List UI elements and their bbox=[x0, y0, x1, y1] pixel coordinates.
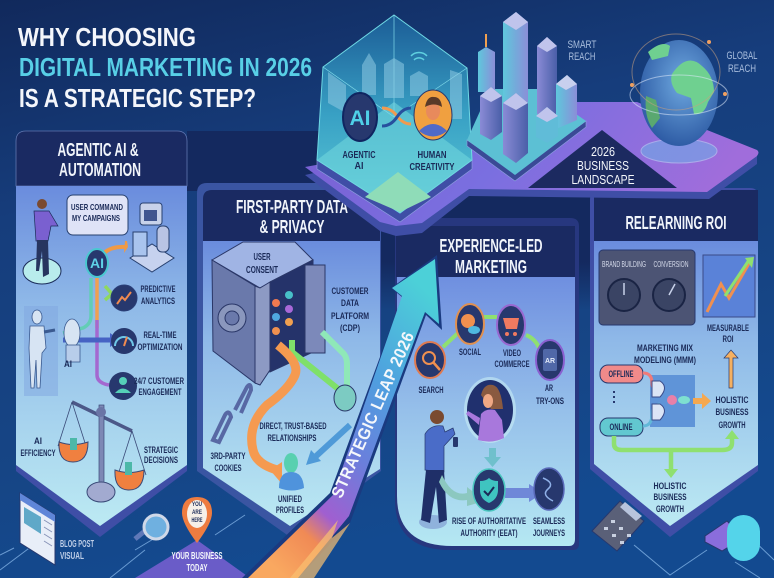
label: holistic growth bottom bbox=[654, 481, 687, 515]
channel labels: VIDEO bbox=[503, 348, 521, 359]
labels: agentic AI and human creativity: HUMAN bbox=[418, 149, 446, 161]
label: smart reach: SMART bbox=[568, 39, 597, 51]
label: global reach: REACH bbox=[728, 63, 756, 75]
arrow: strategic leap: STRATEGIC LEAP 2026 bbox=[328, 329, 418, 501]
top platform: 2026 business landscape bbox=[305, 12, 758, 236]
channel labels: COMMERCE bbox=[494, 359, 530, 370]
icon: you are here pin: ARE bbox=[192, 509, 202, 516]
icon: search bbox=[415, 342, 445, 378]
label: blog post visual: BLOG POST bbox=[60, 539, 94, 550]
icon: robot at console bbox=[130, 203, 174, 272]
speech bubble: MY CAMPAIGNS bbox=[72, 213, 120, 223]
icon: real-time optimization bbox=[111, 328, 183, 354]
icon: predictive analytics bbox=[111, 284, 176, 311]
glass slab: AI and creativity bbox=[317, 15, 472, 222]
diagram: MMM logic flow: OFFLINE bbox=[608, 369, 634, 380]
label: blog post visual: VISUAL bbox=[60, 551, 84, 562]
heading: experience-led: EXPERIENCE-LED bbox=[440, 236, 542, 256]
icon: AI badge bbox=[343, 93, 377, 141]
label: measurable ROI: MEASURABLE bbox=[707, 323, 749, 334]
icon: customer engagement: 24/7 CUSTOMER bbox=[134, 376, 184, 387]
labels: authority and journeys: JOURNEYS bbox=[533, 528, 565, 539]
icon: calculator bbox=[592, 501, 644, 551]
icon: balance scale bbox=[58, 402, 146, 502]
label: blog post visual bbox=[60, 539, 94, 562]
heading: agentic AI: AUTOMATION bbox=[59, 160, 141, 180]
heading: first-party data bbox=[236, 197, 348, 237]
label: AI: AI bbox=[64, 359, 72, 370]
arrow: green growth path bbox=[614, 430, 739, 478]
label: smart reach: REACH bbox=[568, 51, 596, 63]
control panel: brand building and conversion: CONVERSION bbox=[654, 260, 689, 269]
channel labels: AR bbox=[545, 383, 553, 394]
label: AI efficiency: AI bbox=[34, 436, 42, 447]
label: strategic decisions bbox=[144, 445, 178, 466]
label: marketing mix modeling: MARKETING MIX bbox=[637, 343, 693, 354]
label: 3rd-party cookies: COOKIES bbox=[214, 463, 242, 474]
icon: blog post visual bbox=[20, 493, 55, 565]
figure: woman in circle bbox=[464, 377, 516, 443]
city skyline bbox=[467, 12, 586, 181]
label: strategic decisions: STRATEGIC bbox=[144, 445, 178, 456]
label: 3rd-party cookies bbox=[210, 451, 246, 474]
label: measurable ROI: ROI bbox=[722, 334, 734, 345]
icon: cyan capsule bbox=[727, 515, 760, 561]
icon: globe bbox=[630, 34, 728, 163]
label: holistic growth bottom: HOLISTIC bbox=[654, 481, 687, 492]
figure: humanoid robot bbox=[24, 306, 80, 396]
icon: real-time optimization: OPTIMIZATION bbox=[138, 342, 183, 353]
icon: seamless journeys bbox=[534, 468, 564, 510]
labels: authority and journeys: RISE OF AUTHORITATIVE bbox=[452, 516, 526, 527]
bottom circuit lines bbox=[0, 515, 774, 578]
figure: user with phone bbox=[23, 199, 61, 284]
icon: AI badge with arrow: AI bbox=[90, 255, 104, 271]
icon: customer engagement bbox=[109, 372, 184, 400]
channel labels: SEARCH bbox=[418, 385, 444, 396]
icon: unified profile bbox=[279, 453, 304, 490]
label: smart reach bbox=[568, 39, 597, 63]
label: unified profiles: UNIFIED bbox=[278, 494, 302, 505]
icon: broken chain bbox=[213, 385, 251, 442]
labels: agentic AI and human creativity: CREATIVITY bbox=[410, 161, 454, 173]
label: customer data platform: PLATFORM bbox=[331, 311, 369, 322]
label: AI efficiency bbox=[20, 436, 56, 459]
icon: human creativity bbox=[414, 90, 452, 140]
channel labels bbox=[418, 347, 564, 407]
panel: agentic AI and automation bbox=[16, 131, 187, 537]
label: direct relationships: RELATIONSHIPS bbox=[268, 433, 316, 444]
panel: experience-led marketing bbox=[395, 218, 579, 550]
label: measurable ROI bbox=[707, 323, 749, 345]
icon: purple block bbox=[705, 521, 735, 551]
title: IS A STRATEGIC STEP? bbox=[19, 83, 256, 113]
icon: AI badge with arrow bbox=[86, 241, 128, 277]
diagram: MMM logic flow: ONLINE bbox=[610, 422, 632, 433]
heading: experience-led: MARKETING bbox=[455, 257, 527, 277]
channel labels: SOCIAL bbox=[459, 347, 481, 358]
label: customer data platform: DATA bbox=[341, 298, 359, 309]
arrow: strategic leap bbox=[242, 255, 442, 578]
landscape triangle: LANDSCAPE bbox=[572, 172, 635, 187]
control panel: brand building and conversion bbox=[599, 250, 695, 325]
icon: you are here pin bbox=[182, 497, 212, 543]
data pipes bbox=[252, 332, 356, 484]
icon: customer engagement: ENGAGEMENT bbox=[138, 387, 182, 398]
label: 3rd-party cookies: 3RD-PARTY bbox=[210, 451, 246, 462]
figure: man with phone bbox=[419, 410, 458, 529]
labels: authority and journeys: SEAMLESS bbox=[533, 516, 565, 527]
decorative dark backdrop band bbox=[187, 131, 387, 191]
icon: shield bbox=[473, 469, 505, 511]
icon: vault safe bbox=[212, 242, 325, 385]
labels: agentic AI and human creativity: AI bbox=[354, 160, 364, 172]
flow lines from AI bbox=[63, 278, 120, 385]
heading: agentic AI bbox=[58, 140, 141, 180]
label: holistic growth right bbox=[716, 395, 749, 431]
title bbox=[18, 22, 312, 113]
chart: rising ROI bbox=[703, 255, 755, 317]
you are here base bbox=[135, 540, 250, 578]
label: holistic growth right: HOLISTIC bbox=[716, 395, 749, 406]
landscape triangle bbox=[528, 130, 677, 188]
label: holistic growth right: BUSINESS bbox=[716, 407, 748, 418]
title: DIGITAL MARKETING IN 2026 bbox=[19, 52, 312, 82]
diagram: MMM logic flow bbox=[600, 365, 711, 436]
label: unified profiles: PROFILES bbox=[276, 505, 304, 516]
label: direct relationships bbox=[260, 421, 327, 444]
icon: real-time optimization: REAL-TIME bbox=[144, 330, 176, 341]
label: direct relationships: DIRECT, TRUST-BASED bbox=[260, 421, 327, 432]
panel: relearning ROI bbox=[590, 188, 758, 537]
heading: first-party data: FIRST-PARTY DATA bbox=[236, 197, 348, 217]
label: customer data platform: CUSTOMER bbox=[332, 286, 369, 297]
icon: social bbox=[456, 304, 484, 344]
labels: authority and journeys bbox=[452, 516, 565, 539]
labels: agentic AI and human creativity: AGENTIC bbox=[342, 149, 376, 161]
label: global reach: GLOBAL bbox=[726, 50, 758, 62]
channel connectors bbox=[443, 317, 540, 350]
label: marketing mix modeling: MODELING (MMM) bbox=[634, 355, 696, 366]
label: holistic growth bottom: BUSINESS bbox=[654, 492, 686, 503]
you are here base: TODAY bbox=[186, 563, 208, 574]
you are here base: YOUR BUSINESS bbox=[172, 551, 223, 562]
heading: experience-led bbox=[440, 236, 542, 277]
control panel: brand building and conversion: BRAND BUILDING bbox=[602, 260, 646, 269]
speech bubble bbox=[67, 195, 128, 235]
label: global reach bbox=[726, 50, 758, 75]
icon: vault safe: USER bbox=[254, 251, 271, 263]
channel labels: TRY-ONS bbox=[536, 396, 564, 407]
label: holistic growth bottom: GROWTH bbox=[656, 504, 684, 515]
landscape triangle: 2026 bbox=[591, 144, 615, 159]
icon: AR try-ons bbox=[536, 340, 564, 380]
label: marketing mix modeling bbox=[634, 343, 696, 366]
heading: first-party data: & PRIVACY bbox=[260, 217, 324, 237]
label: holistic growth right: GROWTH bbox=[718, 420, 746, 431]
heading: agentic AI: AGENTIC AI & bbox=[58, 140, 138, 160]
flow arrows to shield bbox=[439, 448, 543, 506]
icon: video commerce bbox=[497, 305, 525, 345]
icon: magnifier bbox=[135, 515, 168, 539]
speech bubble: USER COMMAND bbox=[71, 202, 123, 212]
arrow: growth up to ROI bbox=[724, 350, 738, 388]
landscape triangle: BUSINESS bbox=[577, 158, 629, 173]
icon: predictive analytics: PREDICTIVE bbox=[140, 284, 176, 295]
icon: exchange arrows bbox=[382, 108, 411, 126]
label: AI efficiency: EFFICIENCY bbox=[20, 448, 56, 459]
label: customer data platform bbox=[331, 286, 369, 334]
labels: authority and journeys: AUTHORITY (EEAT) bbox=[460, 528, 518, 539]
labels: agentic AI and human creativity bbox=[342, 149, 454, 173]
label: customer data platform: (CDP) bbox=[340, 323, 360, 334]
label: strategic decisions: DECISIONS bbox=[144, 455, 178, 466]
icon: you are here pin: YOU bbox=[192, 501, 202, 508]
icon: AI badge: AI bbox=[350, 107, 370, 130]
icon: you are here pin: HERE bbox=[192, 517, 203, 524]
title: WHY CHOOSING bbox=[18, 22, 196, 52]
icon: vault safe: CONSENT bbox=[246, 264, 278, 276]
icon: AR try-ons: AR bbox=[545, 358, 555, 365]
panel: first-party data and privacy bbox=[197, 183, 381, 537]
icon: predictive analytics: ANALYTICS bbox=[141, 296, 175, 307]
label: unified profiles bbox=[276, 494, 304, 516]
